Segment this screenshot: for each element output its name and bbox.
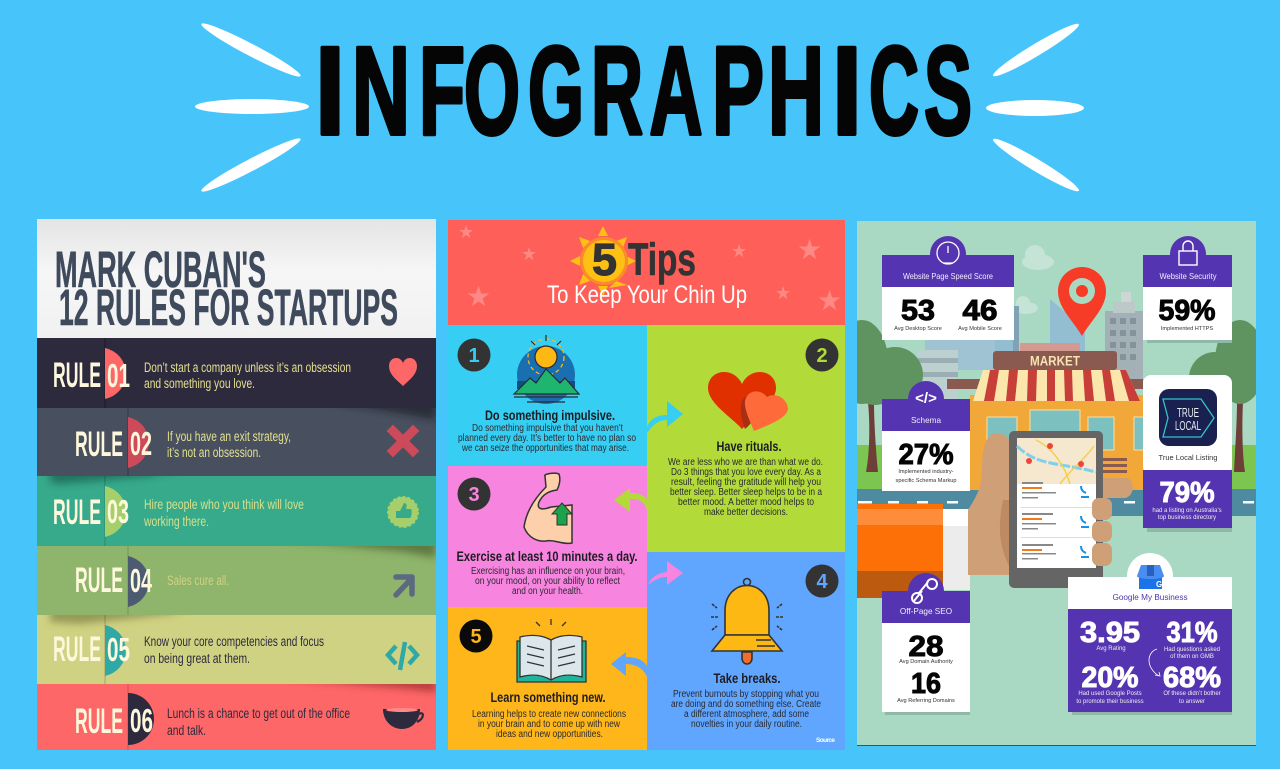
number 2: 2 xyxy=(816,345,828,367)
stars: ★ xyxy=(797,234,822,265)
sleeve xyxy=(857,504,970,598)
tip 4 xyxy=(647,552,845,750)
tip 4: novelties in your daily routine. xyxy=(691,719,802,730)
card: google my business xyxy=(1068,553,1232,715)
icon: flexed arm xyxy=(524,473,572,543)
arrow: gmb curve xyxy=(1149,649,1160,676)
tip 5: Learning helps to create new connections xyxy=(472,709,626,720)
rule 01 xyxy=(37,338,436,408)
tip 2: better mood. A better mood helps to xyxy=(678,497,814,508)
awning xyxy=(973,370,1140,401)
icon: store: G xyxy=(1156,580,1162,589)
title: F xyxy=(419,22,465,161)
card: true local: 79% xyxy=(1160,477,1215,509)
card: google my business: of them on GMB xyxy=(1170,654,1214,660)
tip 4: Prevent burnouts by stopping what you xyxy=(673,689,819,700)
card: google my business: 31% xyxy=(1166,617,1218,649)
logo: true local: LOCAL xyxy=(1175,418,1201,433)
number 4 xyxy=(806,564,838,598)
icon: bell xyxy=(711,578,783,664)
rule 05: Know your core competencies and focus xyxy=(144,634,324,649)
icon: padlock xyxy=(1179,241,1197,265)
arrow: tip 2 to 3 xyxy=(614,488,647,512)
title: H xyxy=(768,22,824,161)
tip 3: Exercising has an influence on your brain, xyxy=(471,566,625,577)
rule 01: Don’t start a company unless it’s an obsession xyxy=(144,360,351,375)
card: website security: Implemented HTTPS xyxy=(1161,326,1213,332)
tip 2: better sleep. Better sleep helps to be in a xyxy=(670,487,822,498)
icon: link plus xyxy=(912,579,937,603)
rule 02 xyxy=(37,408,436,476)
rule 04: Sales cure all. xyxy=(167,573,229,588)
card: off-page seo: 16 xyxy=(911,668,941,700)
header: Mark Cuban title: 12 RULES FOR STARTUPS xyxy=(59,279,398,336)
number 1: 1 xyxy=(468,345,480,367)
card: google my business: Avg Rating xyxy=(1096,646,1126,652)
card: schema: Schema xyxy=(911,416,941,425)
decorative rays right xyxy=(986,19,1084,196)
card: google my business: 3.95 xyxy=(1080,617,1140,649)
tree: right xyxy=(1189,320,1256,472)
rule 06: 06 xyxy=(130,702,153,739)
stars: ★ xyxy=(775,283,791,303)
stars: ★ xyxy=(521,244,537,264)
card: page speed: 46 xyxy=(962,295,998,327)
card: schema: Implemented industry- xyxy=(898,469,954,475)
card: google my business: 68% xyxy=(1163,662,1221,694)
rule 01: RULE xyxy=(53,356,101,395)
ground and road xyxy=(857,445,1256,516)
card: google my business: Had questions asked xyxy=(1164,647,1220,653)
decorative rays left xyxy=(195,19,309,196)
tip 5 xyxy=(448,607,647,750)
stars: ★ xyxy=(466,281,491,312)
rule 01: 01 xyxy=(107,357,130,394)
card: schema xyxy=(882,381,970,491)
number 1 xyxy=(458,338,490,372)
icon: cross xyxy=(393,431,413,451)
rule 06: and talk. xyxy=(167,723,206,738)
logo: true local xyxy=(1159,389,1217,446)
card: website security: 59% xyxy=(1158,295,1216,327)
card: google my business: Google My Business xyxy=(1112,593,1188,602)
title: I xyxy=(832,22,862,161)
rule 06: Lunch is a chance to get out of the office xyxy=(167,706,350,721)
icon: cup xyxy=(383,708,423,729)
icon: hearts xyxy=(708,372,788,431)
card: google my business: to answer xyxy=(1179,699,1205,705)
city buildings xyxy=(918,292,1143,400)
header: Mark Cuban title: MARK CUBAN'S xyxy=(55,241,266,298)
card: google my business: Had used Google Posts xyxy=(1078,691,1142,697)
icon: heart xyxy=(389,358,417,386)
header: 5 tips xyxy=(448,220,845,325)
tip 4: Source xyxy=(816,737,835,744)
stars: ★ xyxy=(731,241,747,261)
rule 03 xyxy=(37,476,436,546)
rule 04: 04 xyxy=(130,562,152,599)
rule 04: RULE xyxy=(75,561,123,600)
card: website security: Website Security xyxy=(1160,272,1217,281)
rule 06 xyxy=(37,678,436,750)
rule 05: 05 xyxy=(107,631,130,668)
hand xyxy=(968,433,1133,575)
tip 4: are doing and do something else. Create xyxy=(671,699,821,710)
icon: sun xyxy=(570,226,636,296)
tree: left xyxy=(857,320,923,472)
rule 02: If you have an exit strategy, xyxy=(167,429,291,444)
rule 05: RULE xyxy=(53,630,101,669)
location pin xyxy=(1058,267,1106,336)
title: G xyxy=(528,22,584,161)
tip 4: a different atmosphere, add some xyxy=(684,709,809,720)
listing rows xyxy=(1021,482,1093,560)
card: google my business: to promote their business xyxy=(1076,699,1144,705)
card: schema: 27% xyxy=(898,439,954,471)
number 4: 4 xyxy=(816,571,828,593)
title: R xyxy=(591,22,643,161)
number 2 xyxy=(806,338,838,372)
rule 02: RULE xyxy=(75,425,123,464)
header: 5 tips: To Keep Your Chin Up xyxy=(547,281,747,309)
card: schema: </> xyxy=(915,390,937,407)
sign: market: MARKET xyxy=(1030,354,1081,368)
arrow: tip 4 to 5 xyxy=(611,652,647,677)
rule 05 xyxy=(37,608,436,684)
tip 2: Do 3 things that you love every day. As a xyxy=(671,467,821,478)
rule 06: RULE xyxy=(75,702,123,741)
arrow: tip 3 to 4 xyxy=(648,561,683,585)
panel: local SEO market xyxy=(836,221,1265,746)
number 3: 3 xyxy=(468,484,480,506)
rule 01: and something you love. xyxy=(144,376,255,391)
tip 5: Learn something new. xyxy=(490,689,606,705)
header: 5 tips: Tips xyxy=(628,234,696,285)
tip 3 xyxy=(448,466,647,607)
market shop xyxy=(947,343,1144,490)
card: schema: specific Schema Markup xyxy=(896,478,956,484)
tip 5: ideas and new opportunities. xyxy=(496,729,603,740)
tip 2: We are less who we are than what we do. xyxy=(668,457,823,468)
icon: open book xyxy=(517,619,586,682)
sign: market xyxy=(993,351,1117,370)
stars: ★ xyxy=(817,285,842,316)
card: true local: top business directory xyxy=(1158,515,1216,521)
tablet xyxy=(1009,431,1103,588)
fingers xyxy=(1092,498,1112,566)
card: off-page seo: Off-Page SEO xyxy=(900,607,952,616)
icon: store xyxy=(1137,565,1164,589)
card: off-page seo: Avg Domain Authority xyxy=(899,659,953,665)
card: page speed xyxy=(882,236,1014,340)
title: A xyxy=(650,22,702,161)
card: off-page seo: 28 xyxy=(908,631,944,663)
card: website security xyxy=(1143,236,1232,343)
title: S xyxy=(924,22,972,161)
title: I xyxy=(315,22,345,161)
card: true local xyxy=(1143,375,1232,532)
tip 2 xyxy=(647,325,845,552)
rule 03: working there. xyxy=(143,514,209,529)
title: O xyxy=(464,22,520,161)
arrow: tip 1 to 2 xyxy=(647,401,683,433)
tip 1: planned every day. It’s better to have no plan so xyxy=(458,433,636,444)
title xyxy=(315,22,972,161)
title: P xyxy=(712,22,764,161)
card: off-page seo xyxy=(882,573,970,715)
header: 5 tips: 5 xyxy=(592,234,617,285)
tip 2: result, feeling the gratitude will help you xyxy=(671,477,821,488)
rule 03: Hire people who you think will love xyxy=(144,497,304,512)
panel: 5 tips xyxy=(448,220,845,750)
icon: badge xyxy=(388,497,418,527)
card: true local: had a listing on Australia’s xyxy=(1152,508,1222,514)
tip 1: Do something impulsive that you haven’t xyxy=(472,423,623,434)
icon: code xyxy=(388,642,417,670)
card: page speed: Avg Mobile Score xyxy=(958,326,1002,332)
number 5: 5 xyxy=(470,626,482,648)
stars xyxy=(458,222,842,316)
tip 4: Take breaks. xyxy=(714,670,780,686)
card: google my business: Of these didn’t bother xyxy=(1163,691,1221,697)
card: page speed: 53 xyxy=(901,295,935,327)
rule 03: 03 xyxy=(107,493,129,530)
rule 03: RULE xyxy=(53,493,101,532)
title: N xyxy=(352,22,410,161)
icon: sun and mountains xyxy=(514,335,579,404)
card: page speed: Website Page Speed Score xyxy=(903,272,993,281)
card: google my business: 20% xyxy=(1082,662,1139,694)
card: true local: True Local Listing xyxy=(1159,453,1217,462)
tip 5: in your brain and to come up with new xyxy=(478,719,621,730)
tip 3: and on your health. xyxy=(512,586,583,597)
title: C xyxy=(869,22,919,161)
stars: ★ xyxy=(458,222,474,242)
panel: Mark Cuban rules xyxy=(37,219,436,750)
card: page speed: Avg Desktop Score xyxy=(894,326,942,332)
icon: arrow xyxy=(396,577,412,595)
icon: gauge xyxy=(937,242,959,264)
tip 1: Do something impulsive. xyxy=(485,407,615,423)
rule 02: it’s not an obsession. xyxy=(167,445,261,460)
tip 3: on your mood, on your ability to reflect xyxy=(475,576,620,587)
tip 1 xyxy=(448,325,647,466)
tip 2: Have rituals. xyxy=(716,438,782,454)
number 3 xyxy=(458,478,490,510)
header: Mark Cuban title xyxy=(37,219,436,338)
tip 3: Exercise at least 10 minutes a day. xyxy=(456,548,638,564)
rule 04 xyxy=(37,546,436,615)
card: off-page seo: Avg Referring Domains xyxy=(897,698,955,704)
rule 05: on being great at them. xyxy=(144,651,250,666)
tip 1: we can seize the opportunities that may arise. xyxy=(461,443,629,454)
tip 2: make better decisions. xyxy=(704,507,788,518)
clouds xyxy=(1014,245,1054,314)
rule 02: 02 xyxy=(130,425,152,462)
logo: true local: TRUE xyxy=(1177,405,1199,420)
number 5 xyxy=(460,620,492,652)
